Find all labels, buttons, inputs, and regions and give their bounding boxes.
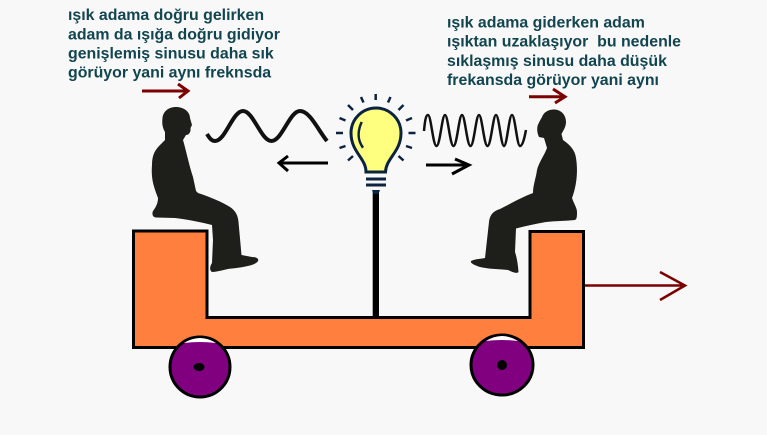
right man silhouette	[471, 109, 577, 273]
arrow: left observer motion	[142, 84, 188, 98]
text block: right observer: sıklaşmış sinusu daha düşük	[447, 53, 667, 70]
arrow: cart motion	[585, 272, 685, 300]
icon: light bulb	[336, 94, 416, 194]
pole	[373, 191, 379, 318]
left man silhouette	[152, 107, 258, 272]
arrow: left light direction	[279, 156, 328, 171]
wheel: left	[170, 337, 230, 397]
wheel: right	[471, 335, 533, 395]
text block: left observer	[68, 7, 280, 81]
compressed sine wave	[424, 115, 526, 146]
arrow: right light direction	[426, 159, 469, 174]
text block: right observer: ışıktan uzaklaşıyor bu nedenle	[447, 34, 681, 50]
cart body	[134, 231, 584, 348]
text block: right observer	[447, 14, 681, 89]
text block: left observer: ışık adama doğru gelirken	[68, 7, 264, 24]
text block: left observer: adam da ışığa doğru gidiyor	[68, 26, 280, 43]
wide sine wave	[207, 111, 327, 141]
text block: right observer: ışık adama giderken adam	[447, 14, 645, 32]
text block: left observer: genişlemiş sinusu daha sık	[68, 45, 274, 62]
text block: right observer: frekansda görüyor yani aynı	[447, 72, 659, 89]
text block: left observer: görüyor yani aynı freknsda	[68, 64, 271, 81]
arrow: right observer motion	[529, 89, 565, 103]
